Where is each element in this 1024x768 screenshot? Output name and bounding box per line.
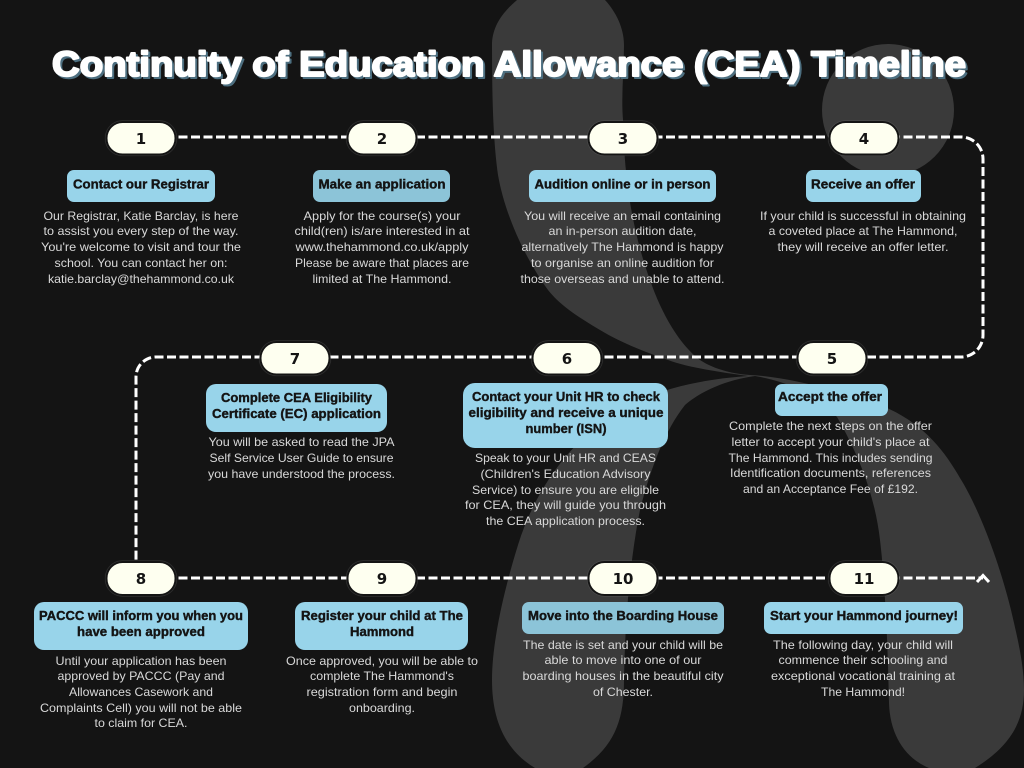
description 7: you have understood the process.	[208, 467, 395, 481]
description 1	[41, 209, 241, 286]
number badge 7	[260, 342, 330, 374]
description 10	[522, 638, 724, 699]
number badge 9	[348, 562, 416, 595]
description 9	[286, 654, 478, 715]
description 5: letter to accept your child's place at	[732, 435, 930, 449]
number badge 5: 5	[827, 350, 837, 368]
number badge 4: 4	[859, 130, 869, 148]
description 5	[728, 419, 932, 496]
description 5: Complete the next steps on the offer	[729, 419, 932, 433]
description 11: commence their schooling and	[778, 653, 948, 667]
description 2: limited at The Hammond.	[312, 272, 452, 286]
description 6: Speak to your Unit HR and CEAS	[475, 451, 656, 465]
heading 6	[463, 383, 668, 448]
heading 4	[806, 170, 921, 202]
description 7: You will be asked to read the JPA	[208, 435, 394, 449]
number badge 10	[588, 562, 658, 595]
step 6	[463, 342, 668, 528]
heading 7	[206, 384, 387, 432]
description 2: Apply for the course(s) your	[304, 209, 460, 223]
dashed timeline path	[136, 137, 989, 582]
step 5	[728, 342, 932, 496]
number badge 1	[106, 122, 176, 154]
description 10: able to move into one of our	[544, 653, 702, 667]
description 9: Once approved, you will be able to	[286, 654, 478, 668]
number badge 7: 7	[290, 350, 300, 368]
description 10: of Chester.	[593, 685, 653, 699]
title: Continuity of Education Allowance (CEA) Timeline	[54, 47, 968, 86]
description 1: katie.barclay@thehammond.co.uk	[48, 272, 235, 286]
heading 5: Accept the offer	[778, 389, 882, 404]
description 3: to organise an online audition for	[531, 256, 714, 270]
description 1: school. You can contact her on:	[54, 256, 228, 270]
heading 10: Move into the Boarding House	[528, 608, 718, 623]
description 11: The following day, your child will	[773, 638, 953, 652]
heading 10	[522, 602, 724, 634]
description 8: Allowances Casework and	[69, 685, 213, 699]
description 9: complete The Hammond's	[310, 669, 454, 683]
heading 6: eligibility and receive a unique	[468, 405, 664, 420]
heading 7: Certificate (EC) application	[212, 406, 381, 421]
heading 6: Contact your Unit HR to check	[472, 389, 661, 404]
heading 11	[764, 602, 963, 634]
number badge 2	[348, 122, 416, 154]
heading 8	[34, 602, 248, 650]
description 1: to assist you every step of the way.	[44, 224, 239, 238]
heading 7: Complete CEA Eligibility	[221, 390, 373, 405]
description 11	[771, 638, 956, 699]
heading 4: Receive an offer	[811, 176, 915, 192]
description 4: If your child is successful in obtaining	[760, 209, 966, 223]
number badge 1: 1	[136, 130, 146, 148]
heading 2: Make an application	[318, 176, 446, 192]
number badge 5	[798, 342, 866, 374]
description 5: Identification documents, references	[730, 466, 931, 480]
description 3: those overseas and unable to attend.	[520, 272, 724, 286]
description 4: a coveted place at The Hammond,	[768, 224, 958, 238]
description 7	[208, 435, 395, 481]
description 6: for CEA, they will guide you through	[465, 498, 666, 512]
number badge 4	[830, 122, 898, 154]
description 11: exceptional vocational training at	[771, 669, 956, 683]
heading 9: Register your child at The	[301, 608, 463, 623]
step 9	[286, 562, 478, 715]
description 10: The date is set and your child will be	[523, 638, 723, 652]
description 8: approved by PACCC (Pay and	[58, 669, 224, 683]
description 8: to claim for CEA.	[94, 716, 188, 730]
description 9: registration form and begin	[306, 685, 458, 699]
heading 8: have been approved	[77, 624, 205, 639]
step 2	[294, 122, 470, 286]
step 3	[520, 122, 724, 286]
description 2	[294, 209, 470, 286]
number badge 2: 2	[377, 130, 387, 148]
description 6	[465, 451, 666, 528]
background watermark letter	[492, 0, 1024, 768]
step 11	[764, 562, 963, 699]
number badge 6	[532, 342, 602, 374]
description 3: alternatively The Hammond is happy	[522, 240, 724, 254]
number badge 3	[588, 122, 658, 154]
heading 1	[67, 170, 215, 202]
heading 1: Contact our Registrar	[73, 176, 209, 192]
description 5: and an Acceptance Fee of £192.	[743, 482, 918, 496]
description 7: Self Service User Guide to ensure	[210, 451, 394, 465]
description 8	[40, 654, 242, 730]
description 2: child(ren) is/are interested in at	[294, 224, 470, 238]
number badge 6: 6	[562, 350, 572, 368]
number badge 9: 9	[377, 570, 387, 588]
description 9: onboarding.	[349, 701, 415, 715]
description 5: The Hammond. This includes sending	[728, 451, 932, 465]
description 3: an in-person audition date,	[548, 224, 696, 238]
heading 3	[529, 170, 716, 202]
heading 9	[295, 602, 468, 650]
heading 3: Audition online or in person	[534, 176, 711, 192]
number badge 10: 10	[613, 570, 633, 588]
number badge 3: 3	[618, 130, 628, 148]
description 6: the CEA application process.	[486, 514, 645, 528]
heading 11: Start your Hammond journey!	[770, 608, 958, 623]
step 8	[34, 562, 248, 730]
description 6: (Children's Education Advisory	[480, 467, 650, 481]
description 11: The Hammond!	[821, 685, 905, 699]
title: Continuity of Education Allowance (CEA) Timeline	[52, 45, 966, 84]
heading 2	[313, 170, 450, 202]
description 6: Service) to ensure you are eligible	[472, 483, 659, 497]
description 1: Our Registrar, Katie Barclay, is here	[44, 209, 239, 223]
step 10	[522, 562, 724, 699]
heading 6: number (ISN)	[526, 421, 606, 436]
description 10: boarding houses in the beautiful city	[522, 669, 724, 683]
step 1	[41, 122, 241, 286]
heading 8: PACCC will inform you when you	[39, 608, 243, 623]
description 2: Please be aware that places are	[295, 256, 469, 270]
number badge 8	[106, 562, 176, 595]
description 3: You will receive an email containing	[524, 209, 721, 223]
heading 9: Hammond	[350, 624, 414, 639]
description 8: Until your application has been	[56, 654, 226, 668]
description 1: You're welcome to visit and tour the	[41, 240, 241, 254]
description 8: Complaints Cell) you will not be able	[40, 701, 242, 715]
number badge 11: 11	[854, 570, 874, 588]
description 2: www.thehammond.co.uk/apply	[294, 240, 468, 254]
step 4	[760, 122, 966, 254]
description 4: they will receive an offer letter.	[778, 240, 948, 254]
number badge 8: 8	[136, 570, 146, 588]
heading 5	[775, 384, 888, 416]
step 7	[206, 342, 395, 481]
number badge 11	[830, 562, 898, 595]
description 3	[520, 209, 724, 286]
description 4	[760, 209, 966, 254]
